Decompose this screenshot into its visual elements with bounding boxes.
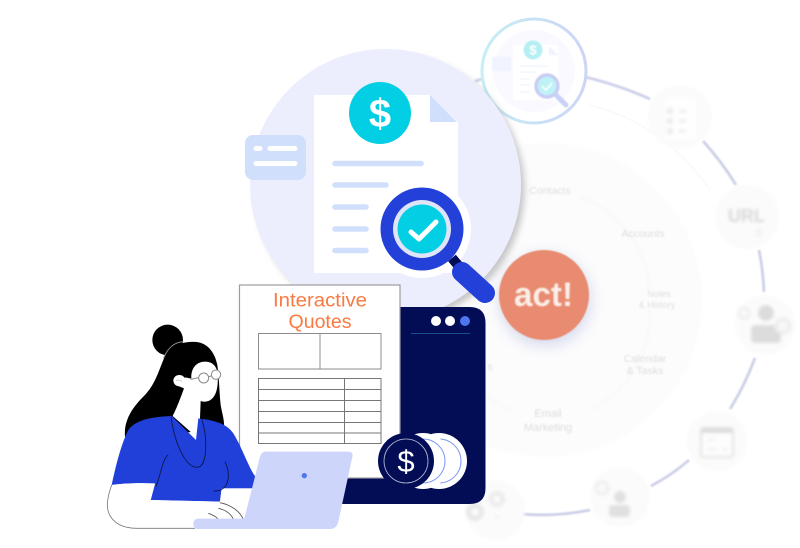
faded ring labels: & History (639, 300, 676, 310)
faded ring labels: Notes (647, 289, 671, 299)
faded ring labels: Marketing (524, 422, 572, 434)
face and neck (173, 362, 218, 437)
faded ring labels: Accounts (621, 228, 665, 240)
faded ring labels (487, 185, 676, 434)
node: person with gears (faded) (735, 295, 795, 355)
laptop (193, 452, 353, 529)
faded ring labels: Email (534, 408, 562, 420)
main circle with shadow (250, 49, 524, 324)
node: gears (faded) (465, 480, 525, 540)
background: pale disc and inner ring (388, 105, 710, 457)
faded ring labels: & Tasks (627, 365, 663, 377)
node: calendar (faded) (687, 411, 747, 471)
document title (273, 290, 367, 333)
hair and bun (125, 325, 224, 438)
node: checklist (faded) (648, 85, 712, 149)
quote document (314, 95, 458, 273)
act! logo badge: act! (514, 276, 573, 314)
icon: dollar coin: $ (369, 92, 391, 136)
faded ring labels: Contacts (529, 185, 571, 197)
outer process ring (475, 75, 764, 515)
icon: dollar coin (349, 82, 411, 144)
node: person and gear (faded) (590, 467, 650, 527)
clothing and hand lines (156, 417, 243, 519)
interactive quotes document (240, 285, 400, 478)
arm (107, 483, 253, 528)
document title: Interactive (273, 290, 367, 312)
navy browser panel (330, 307, 486, 504)
glasses (191, 370, 221, 383)
document title: Quotes (288, 312, 352, 333)
icon: magnifier with check (373, 180, 485, 293)
node: URL (faded) (715, 185, 779, 249)
faded ring labels: s (487, 361, 493, 373)
upper table (258, 334, 381, 369)
node: URL (faded): URL (728, 206, 765, 226)
shirt (112, 416, 255, 502)
lower table (258, 378, 381, 444)
illustration: woman at laptop (107, 325, 353, 529)
node: quote review (faded) (482, 19, 586, 123)
act! logo badge (499, 250, 591, 346)
coin stack (378, 433, 467, 489)
floating card (245, 135, 306, 180)
coin stack: $ (397, 444, 415, 479)
node: quote review (faded): $ (529, 42, 537, 58)
faded ring labels: Calendar (624, 353, 667, 365)
